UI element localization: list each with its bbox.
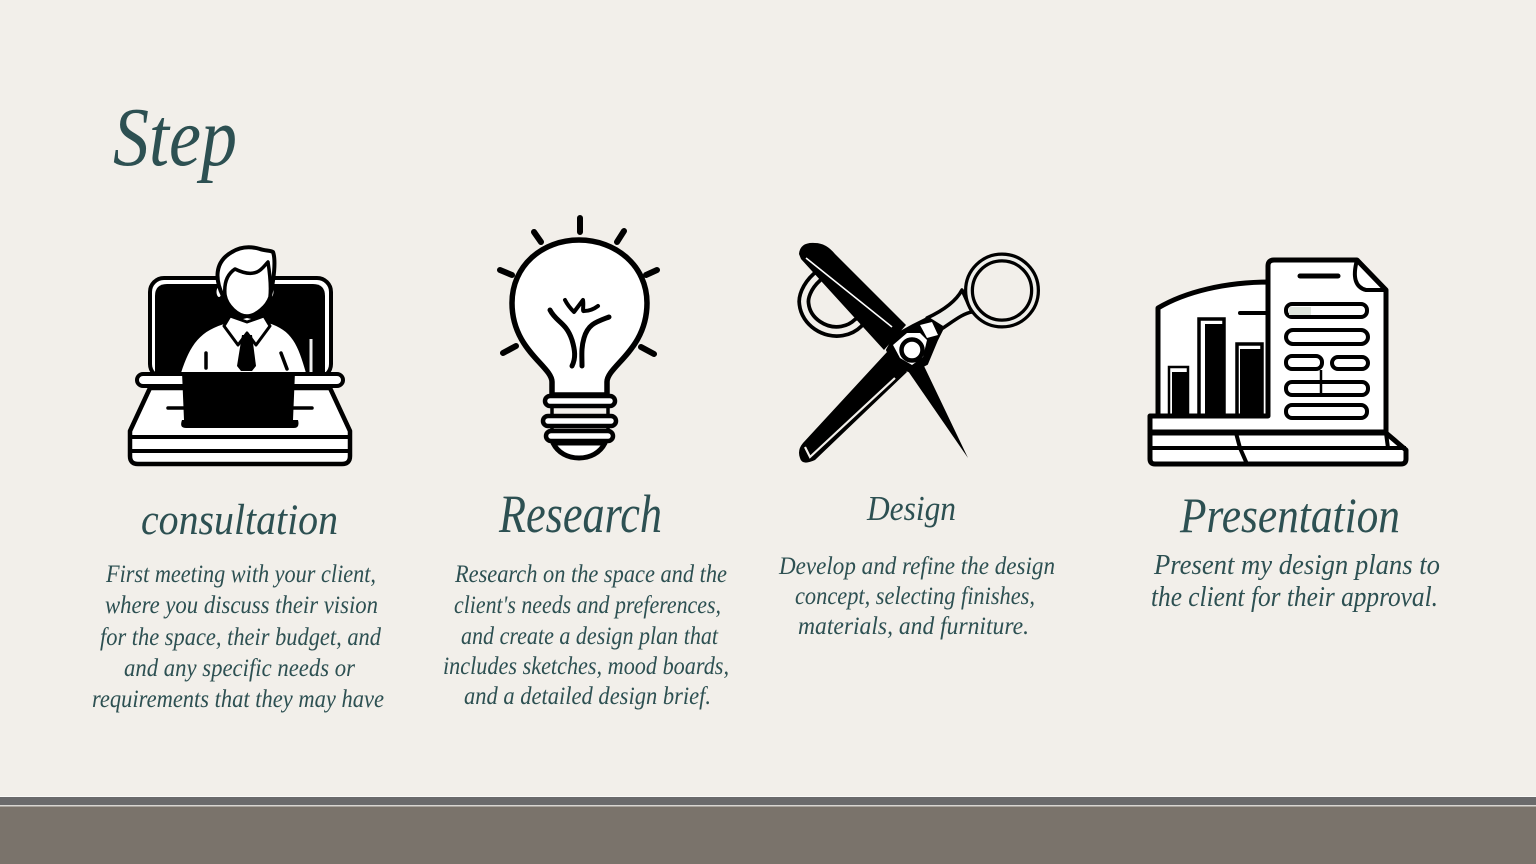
step 4 description: Present my design plans to: [1153, 549, 1440, 581]
step 3 description: Develop and refine the design: [778, 553, 1055, 580]
step 2 description: client's needs and preferences,: [454, 592, 721, 619]
step 2 description: Research on the space and the: [454, 561, 727, 588]
bottom band: [0, 796, 1536, 864]
step 1 description: where you discuss their vision: [105, 592, 378, 619]
step 2 heading: Research: [498, 484, 662, 544]
icon: scissors: [799, 243, 1035, 463]
step 3 heading: Design: [866, 489, 956, 528]
step 1 heading: consultation: [141, 497, 338, 544]
step 3 description: materials, and furniture.: [798, 613, 1029, 640]
title: Step: [113, 91, 237, 184]
icon: light bulb: [500, 218, 657, 458]
step 1 description: [92, 561, 384, 713]
step 2 description: [443, 561, 729, 710]
step 2 description: and create a design plan that: [461, 623, 719, 650]
step 3 description: concept, selecting finishes,: [795, 583, 1035, 610]
step 4 description: the client for their approval.: [1151, 581, 1438, 613]
step 2 description: includes sketches, mood boards,: [443, 653, 729, 680]
step 3 description: [778, 553, 1055, 640]
step 1 description: First meeting with your client,: [105, 561, 376, 588]
icon: consultation person at desk: [130, 247, 350, 464]
step 2 description: and a detailed design brief.: [464, 683, 711, 710]
step 4 description: [1151, 549, 1440, 613]
icon: presentation document and chart: [1150, 260, 1406, 464]
step 1 description: and any specific needs or: [124, 655, 355, 682]
step 1 description: requirements that they may have: [92, 686, 384, 713]
step 1 description: for the space, their budget, and: [100, 624, 381, 651]
step 4 heading: Presentation: [1179, 487, 1400, 543]
